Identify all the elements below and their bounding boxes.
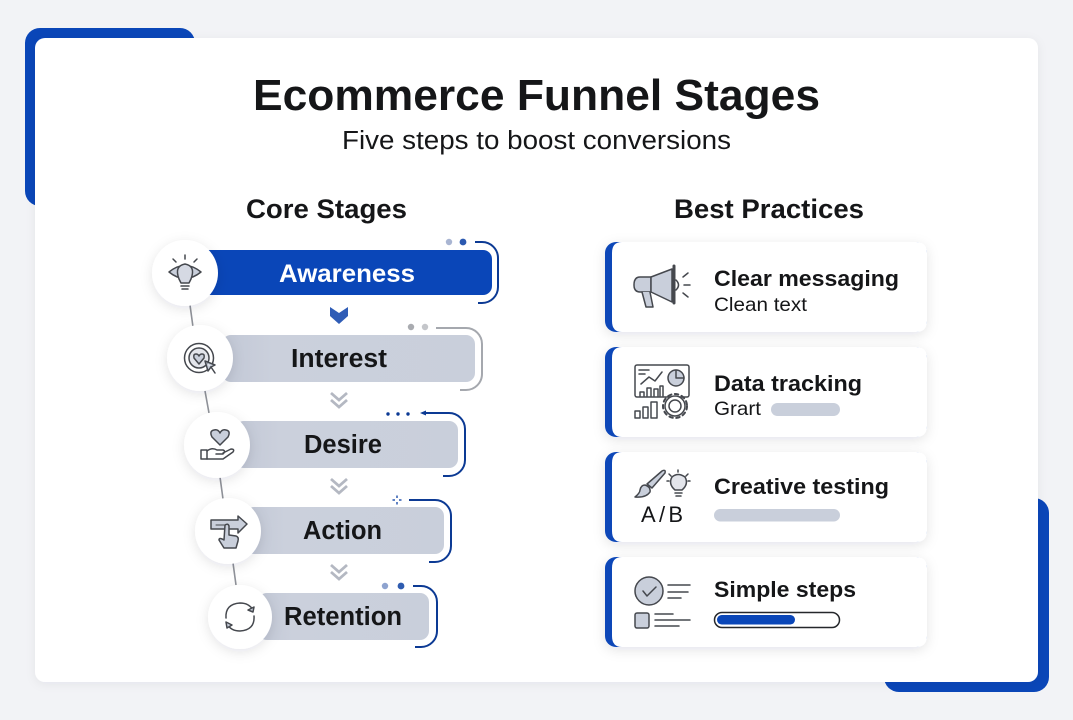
icon: target with heart and cursor [184,344,215,373]
accent: top-left blue corner [25,28,195,206]
subtitle: Five steps to boost conversions [342,127,731,155]
stage: interest: Interest [291,345,388,373]
stage: retention [208,583,437,649]
chevron: awareness to interest [330,307,348,324]
icon: checklist [635,577,690,628]
stage: desire [184,410,465,478]
placeholder bar [714,509,840,522]
card: simple steps [605,557,927,647]
stage: awareness: Awareness [279,260,415,288]
icon: eye with light bulb [169,255,201,289]
stage: desire: Desire [304,431,382,459]
label: creative testing: Creative testing [714,474,889,499]
label: clear messaging: Clear messaging [714,266,899,291]
sublabel: grart: Grart [714,398,762,420]
stage: action: Action [303,517,382,545]
progress bar [714,612,840,628]
placeholder bar [771,403,840,416]
icon: refresh arrows [226,603,254,631]
panel: core stages funnel [152,239,498,649]
heading: best practices: Best Practices [674,194,864,224]
icon text: A/B: A/B [641,502,683,527]
stage: retention: Retention [284,603,402,631]
sublabel: clean text: Clean text [714,294,808,316]
chevron: desire to action [331,479,347,493]
icon: megaphone [634,266,690,307]
icon: arrow button with pointing hand [211,516,247,548]
chevron: interest to desire [331,393,347,407]
icon: hand holding heart [201,430,234,459]
accent: bottom-right blue corner [884,498,1049,692]
chevron: action to retention [331,565,347,579]
panel: best practices [605,242,927,647]
stage: action [195,496,451,564]
icon: dashboard with gear [635,365,689,418]
label: simple steps: Simple steps [714,577,856,602]
heading: core stages: Core Stages [246,194,407,224]
card: data tracking [605,347,927,437]
card: creative testing [605,452,927,542]
stage: awareness [152,239,498,306]
connector lines between stage circles [190,305,236,585]
icon: paintbrush, bulb and A/B [635,470,690,497]
title: Ecommerce Funnel Stages [253,71,820,120]
card: clear messaging [605,242,927,332]
label: data tracking: Data tracking [714,371,862,396]
stage: interest [167,324,482,391]
